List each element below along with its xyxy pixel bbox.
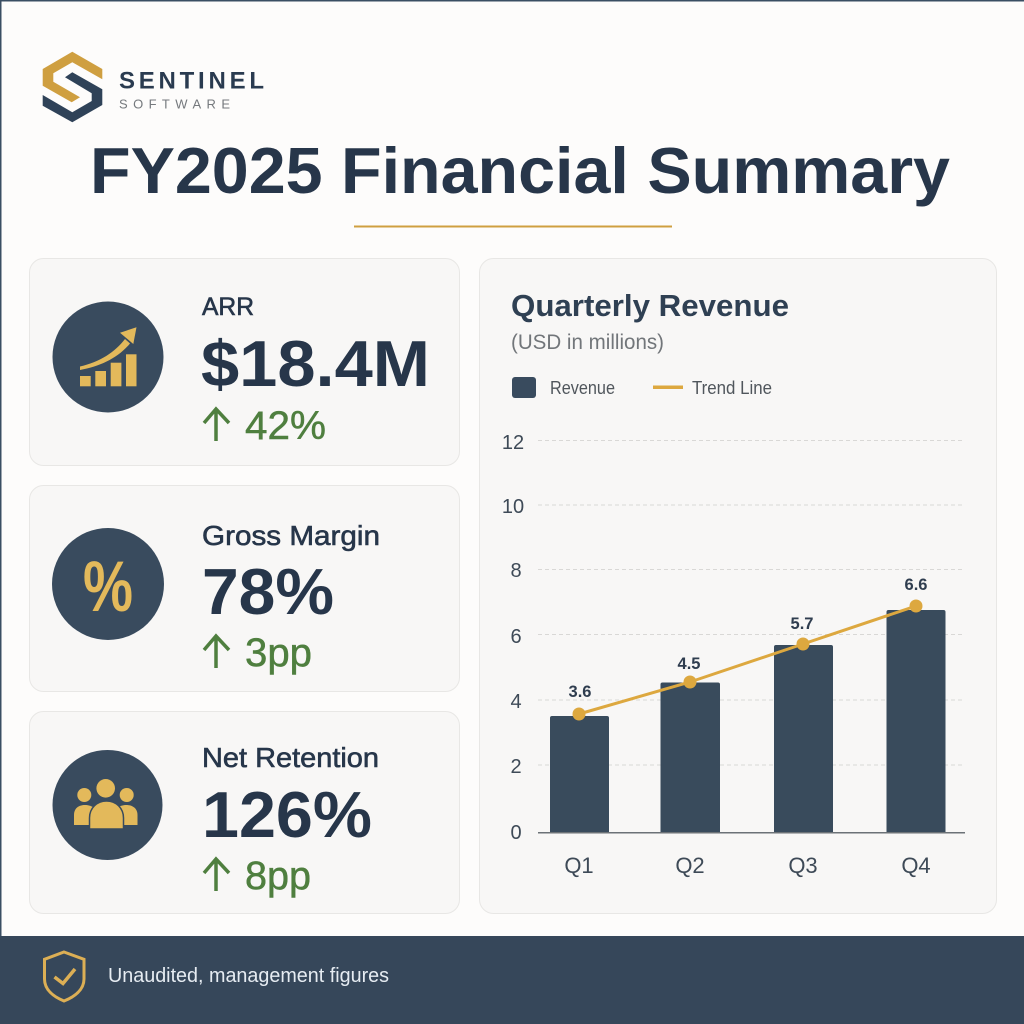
label: ARR: ARR: [202, 293, 254, 321]
data labels: 5.7: [791, 615, 813, 633]
x axis labels: Q4: [901, 853, 931, 878]
data labels: 4.5: [678, 655, 700, 673]
icon: growth chart: [52, 302, 164, 412]
x axis baseline: [538, 832, 965, 834]
logo wordmark: SENTINEL: [119, 68, 264, 94]
label: Gross Margin: Gross Margin: [202, 520, 380, 551]
chart subtitle: (USD in millions): [511, 331, 664, 354]
data labels: 3.6: [569, 683, 591, 701]
x axis labels: [564, 853, 931, 878]
logo mark: [43, 52, 102, 122]
y axis labels: 0: [510, 822, 522, 844]
value: 78%: 78%: [202, 555, 334, 628]
footer note: Unaudited, management figures: [108, 965, 389, 987]
footer bar: [0, 936, 1024, 1024]
icon: percent: [52, 528, 164, 640]
icon: people: [52, 750, 162, 860]
icon: shield check: [44, 952, 84, 1001]
data labels: [569, 576, 927, 701]
x axis labels: Q1: [564, 853, 594, 878]
value: $18.4M: $18.4M: [201, 327, 430, 400]
panel: Net Retention: [30, 712, 460, 914]
change: up 42%: [204, 404, 326, 448]
y axis labels: 2: [510, 756, 522, 778]
chart heading: Quarterly Revenue: [511, 288, 789, 323]
value: 126%: 126%: [202, 778, 372, 851]
panel: Quarterly Revenue chart: [480, 258, 996, 914]
change: up 3pp: 3pp: [245, 631, 312, 675]
legend: Revenue: [550, 378, 615, 398]
grid lines: [538, 440, 965, 765]
panel: ARR: [30, 258, 460, 466]
trend line: [572, 600, 922, 720]
change: up 8pp: [204, 854, 311, 898]
x axis labels: Q2: [675, 853, 705, 878]
logo: Sentinel Software: [43, 52, 264, 122]
icon: percent: %: [83, 548, 133, 627]
change: up 42%: 42%: [245, 404, 326, 448]
title: FY2025 Financial Summary: [90, 135, 950, 207]
legend: Trend Line: [692, 378, 772, 398]
panel: Gross Margin: [30, 486, 460, 692]
legend: [512, 377, 772, 398]
x axis labels: Q3: [788, 853, 818, 878]
bars: [550, 610, 946, 832]
change: up 8pp: 8pp: [245, 854, 311, 898]
data labels: 6.6: [905, 576, 927, 594]
logo subtitle: SOFTWARE: [119, 96, 230, 112]
label: Net Retention: Net Retention: [202, 742, 379, 773]
y axis labels: 6: [510, 626, 522, 648]
y axis labels: 4: [510, 691, 522, 713]
y axis labels: 12: [502, 432, 524, 454]
y axis labels: 10: [502, 496, 524, 518]
change: up 3pp: [204, 631, 312, 675]
y axis labels: 8: [510, 560, 522, 582]
y axis labels: [502, 432, 524, 844]
